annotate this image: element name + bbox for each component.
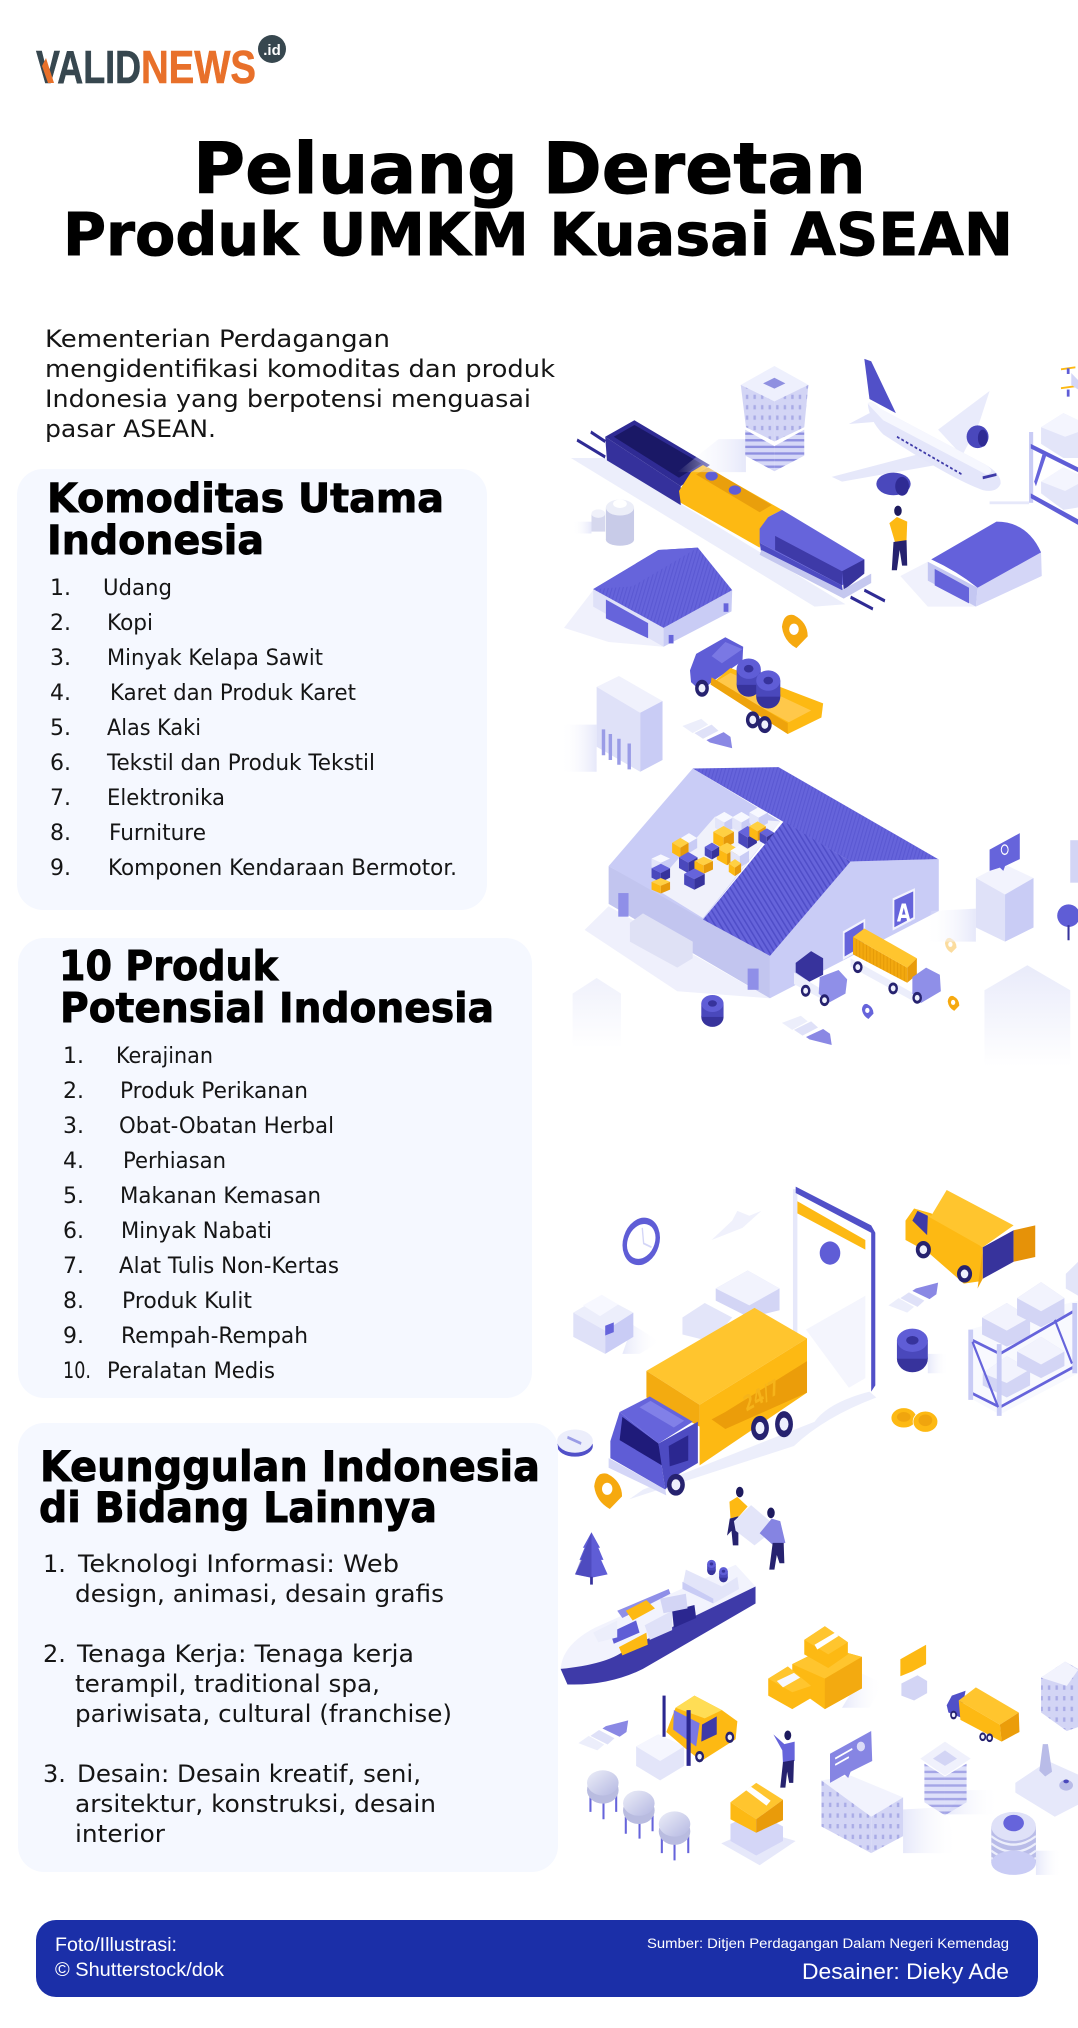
list of products [63,1044,339,1384]
list of advantages: arsitektur, konstruksi, desain [75,1790,436,1818]
source and designer: Desainer: Dieky Ade [802,1959,1009,1984]
list of products: Kerajinan [116,1044,213,1069]
heading: 10 Produk [59,942,280,990]
icon: info disc [557,1429,593,1457]
panel: Keunggulan Indonesia di Bidang Lainnya [18,1423,558,1872]
heading: Indonesia [47,518,264,564]
icon: small pins [862,938,959,1019]
list of products: Makanan Kemasan [120,1184,321,1209]
list of products: 8. [63,1289,84,1314]
list of products: 3. [63,1114,84,1139]
list of commodities: Elektronika [107,786,225,811]
source and designer [647,1935,1009,1984]
intro text: mengidentifikasi komoditas dan produk [45,355,555,383]
list of products: 2. [63,1079,84,1104]
logo: Validnews.id [36,35,286,93]
list of commodities: Udang [103,576,172,601]
icon: large warehouse: A [897,900,911,928]
list of products: Obat-Obatan Herbal [119,1114,334,1139]
icon: tree and side block [1057,840,1078,940]
intro text [45,325,555,443]
intro text: Kementerian Perdagangan [45,325,390,353]
icon: box with speech bubble [924,833,1034,942]
icon: person pointing [773,1730,795,1788]
intro text: Indonesia yang berpotensi menguasai [45,385,531,413]
photo credit [55,1935,225,1981]
icon: three round tanks [587,1770,690,1860]
illustration: logistics bottom scene [557,1187,1078,1875]
icon: tall building [677,366,808,472]
panel: Komoditas Utama Indonesia [17,469,487,910]
heading: Keunggulan Indonesia [40,1442,540,1491]
list of products: Rempah-Rempah [121,1324,308,1349]
arrow: chevrons [682,719,732,748]
photo credit: © Shutterstock/dok [55,1960,225,1981]
icon: factory base with chimney [1015,1744,1078,1817]
list of products: 4. [63,1149,84,1174]
icon: location pin [782,615,808,648]
list of commodities: 4. [50,681,71,706]
icon: grey tower [920,1742,1000,1815]
list of products: 9. [63,1324,84,1349]
list of products: Perhiasan [123,1149,226,1174]
icon: clock [620,1213,663,1270]
icon: chat bubble and small box [900,1645,927,1700]
list of advantages: terampil, traditional spa, [75,1670,380,1698]
list of products: Produk Kulit [122,1289,252,1314]
icon: small box truck [947,1687,1019,1742]
icon: cardboard boxes [573,1271,780,1354]
icon: container truck [851,928,941,1004]
list of products: Minyak Nabati [121,1219,272,1244]
icon: ghost blocks [573,965,1070,1067]
heading [47,476,444,564]
list of advantages: Tenaga Kerja: Tenaga kerja [76,1640,414,1668]
list of advantages: Teknologi Informasi: Web [77,1550,399,1578]
photo credit: Foto/Illustrasi: [55,1935,177,1956]
icon: coil stack [991,1812,1062,1875]
icon: two people carrying box [727,1487,785,1570]
list of commodities: Alas Kaki [107,716,201,741]
intro text: pasar ASEAN. [45,415,216,443]
list of advantages: interior [75,1820,165,1848]
arrow: chevrons up [888,1283,938,1313]
list of commodities: Karet dan Produk Karet [110,681,356,706]
icon: big yellow truck [609,1308,807,1496]
list of commodities: Minyak Kelapa Sawit [107,646,323,671]
icon: hangar [900,522,1042,607]
icon: storage cylinders [573,500,634,546]
icon: location pin [594,1473,622,1509]
heading: di Bidang Lainnya [39,1483,437,1532]
icon: cloud [712,1211,761,1240]
list of advantages: Desain: Desain kreatif, seni, [77,1760,421,1788]
icon: forklift [636,1696,737,1780]
footer bar [36,1920,1038,1997]
icon: yellow van [906,1190,1035,1288]
list of commodities: 5. [50,716,71,741]
illustration: logistics top scene [561,359,1078,1067]
icon: phone [793,1187,875,1392]
title [63,128,1013,269]
list of advantages: design, animasi, desain grafis [75,1580,444,1608]
heading: Komoditas Utama [47,476,444,522]
icon: train [571,420,885,609]
list of products: 7. [63,1254,84,1279]
list of advantages: pariwisata, cultural (franchise) [75,1700,452,1728]
list of commodities: 6. [50,751,71,776]
list of commodities: Tekstil dan Produk Tekstil [106,751,375,776]
icon: shelving with boxes [969,1262,1078,1416]
heading [59,942,494,1032]
logo: Validnews.id: NEWS [141,41,256,93]
icon: office building with panel [821,1731,959,1853]
arrow: chevrons forklift [578,1720,628,1750]
list of commodities: 7. [50,786,71,811]
icon: coins [891,1408,938,1432]
icon: flatbed truck with tires [690,637,823,734]
list of products: Peralatan Medis [107,1359,275,1384]
list of commodities [50,576,457,881]
list of commodities: 8. [50,821,71,846]
list of products: 6. [63,1219,84,1244]
icon: large warehouse [585,767,939,998]
icon: worker person [889,506,907,570]
source and designer: Sumber: Ditjen Perdagangan Dalam Negeri Kemendag [647,1935,1009,1951]
list of commodities: Kopi [107,611,153,636]
icon: factory block [561,676,663,772]
logo: Validnews.id: VALID [36,41,141,93]
list of advantages: 1. [43,1550,66,1578]
list of products: Alat Tulis Non-Kertas [119,1254,339,1279]
list of products: 5. [63,1184,84,1209]
icon: small delivery truck [794,951,847,1006]
icon: yellow box on pallet [721,1783,796,1865]
icon: small warehouse [564,548,732,647]
icon: tires stack [897,1329,948,1373]
icon: road shadow [629,1392,876,1499]
icon: pine tree [575,1532,608,1585]
list of commodities: 1. [50,576,71,601]
icon: right building [1041,1662,1078,1731]
icon: airplane [832,359,1001,496]
list of commodities: 3. [50,646,71,671]
icon: drone [1061,367,1078,397]
list of advantages: 3. [43,1760,66,1788]
list of advantages: 2. [43,1640,66,1668]
icon: yellow cartons [768,1626,883,1709]
heading [39,1442,540,1532]
icon: big yellow truck: 24/7 [741,1375,782,1417]
arrow: chevrons lower [782,1016,832,1045]
logo: Validnews.id: .id [263,42,281,59]
title: Produk UMKM Kuasai ASEAN [63,200,1013,269]
icon: storage shelves [990,413,1078,525]
icon: tires [701,995,724,1027]
list of advantages [43,1550,452,1848]
panel: 10 Produk Potensial Indonesia [18,938,532,1398]
list of commodities: 2. [50,611,71,636]
list of products: Produk Perikanan [120,1079,308,1104]
list of commodities: Furniture [109,821,206,846]
heading: Potensial Indonesia [60,984,494,1032]
title: Peluang Deretan [193,128,866,210]
list of commodities: Komponen Kendaraan Bermotor. [108,856,457,881]
list of products: 1. [63,1044,84,1069]
list of products: 10. [63,1359,91,1384]
list of commodities: 9. [50,856,71,881]
icon: cargo ship [561,1560,756,1685]
